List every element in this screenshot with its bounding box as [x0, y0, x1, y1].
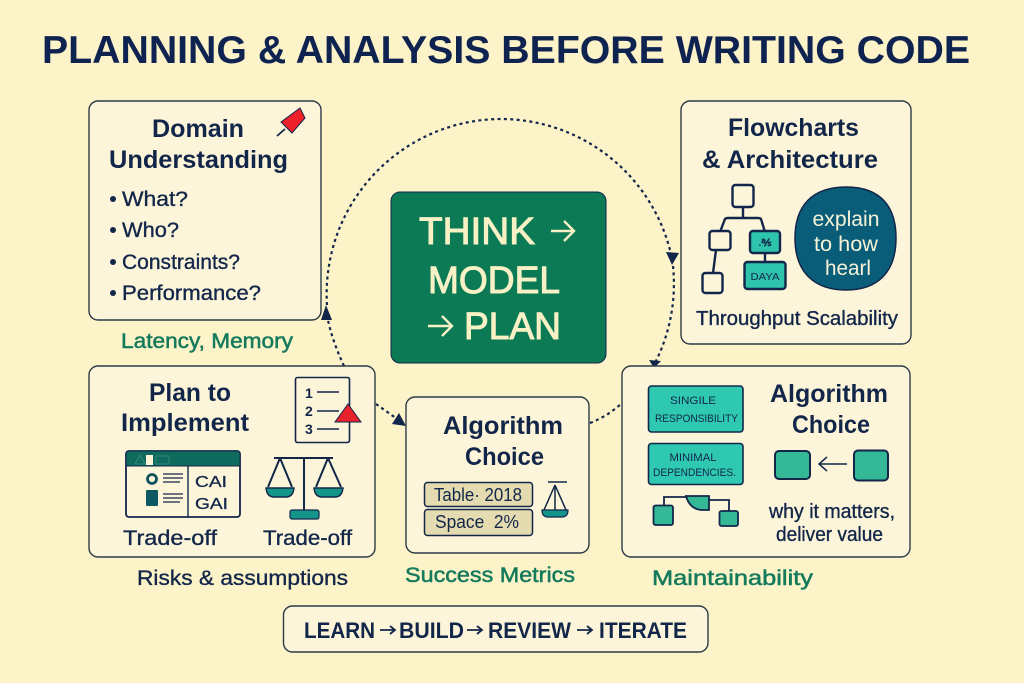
caption: risks and assumptions: Risks & assumptions — [137, 567, 348, 590]
icon: app window — [126, 451, 240, 517]
panel: learn build review iterate — [284, 606, 708, 652]
metric: space: Space 2% — [435, 512, 519, 532]
icon: flowchart: DAYA — [750, 271, 780, 283]
text: why it matters: why it matters, — [768, 501, 895, 523]
icon: numbered checklist with warning — [296, 378, 361, 442]
icon: numbered checklist with warning: 1 — [305, 385, 313, 401]
arrow: review to iterate — [577, 626, 592, 634]
text: why it matters: deliver value — [776, 524, 883, 546]
component: single responsibility: SINGILE — [670, 395, 716, 407]
caption: success metrics: Success Metrics — [405, 564, 575, 587]
heading: algorithm choice: Choice — [792, 411, 870, 439]
heading: algorithm choice: Choice — [465, 443, 544, 471]
heading: plan to implement: Implement — [121, 409, 250, 437]
title: PLANNING & ANALYSIS BEFORE WRITING CODE — [42, 29, 970, 72]
panel: learn build review iterate: LEARN — [304, 618, 375, 643]
component: minimal dependencies: MINIMAL — [670, 452, 716, 464]
arrow: build to review — [467, 626, 482, 634]
caption: trade-off right: Trade-off — [263, 527, 352, 550]
heading: plan to implement — [121, 379, 250, 437]
arrow: learn to build — [380, 626, 395, 634]
panel: central think model plan: PLAN — [464, 306, 561, 348]
heading: flowcharts and architecture: Flowcharts — [728, 114, 859, 142]
callout: explain blob: explain — [812, 208, 880, 231]
panel: algorithm choice center — [406, 397, 589, 553]
icon: numbered checklist with warning: 3 — [305, 421, 313, 437]
metric: space — [424, 510, 532, 536]
bullet list: Constraints? — [122, 251, 240, 274]
heading: domain understanding — [109, 115, 288, 174]
bullet list: Performance? — [122, 282, 261, 305]
panel: flowcharts and architecture — [681, 101, 911, 344]
panel: central think model plan — [391, 192, 606, 363]
bullet list — [110, 188, 261, 305]
callout: explain blob: to how — [814, 233, 879, 256]
caption: latency, memory: Latency, Memory — [121, 330, 294, 353]
component: single responsibility: RESPONSIBILITY — [655, 413, 739, 425]
heading: domain understanding: Domain — [152, 115, 244, 143]
component: minimal dependencies — [648, 444, 743, 484]
heading: algorithm choice — [770, 380, 888, 439]
panel: domain understanding — [89, 101, 321, 320]
icon: small scale — [542, 482, 568, 517]
heading: algorithm choice — [443, 412, 563, 471]
heading: algorithm choice: Algorithm — [443, 412, 563, 440]
panel: plan to implement — [89, 366, 375, 557]
callout: explain blob — [795, 187, 896, 290]
bullet list: Who? — [122, 219, 179, 242]
caption: maintainability: Maintainability — [652, 567, 814, 590]
component: single responsibility — [648, 386, 743, 432]
metric: table: Table· 2018 — [434, 485, 522, 505]
heading: flowcharts and architecture: & Architecture — [702, 146, 878, 174]
icon: app window: GAI — [195, 496, 228, 513]
panel: learn build review iterate: BUILD — [399, 618, 464, 643]
caption: throughput scalability: Throughput Scalability — [696, 308, 898, 330]
arrow: model to plan — [428, 316, 452, 336]
icon: red pin — [277, 108, 305, 136]
heading: plan to implement: Plan to — [149, 379, 231, 407]
dotted cycle arrows — [321, 119, 679, 426]
panel: learn build review iterate: ITERATE — [599, 618, 687, 643]
arrow: think to model — [551, 221, 574, 241]
icon: numbered checklist with warning: 2 — [305, 403, 313, 419]
panel: central think model plan: MODEL — [428, 260, 560, 302]
icon: app window: CAI — [195, 474, 227, 491]
icon: balance scale — [266, 458, 343, 519]
component: minimal dependencies: DEPENDENCIES. — [653, 467, 736, 479]
bullet list: What? — [122, 188, 188, 211]
icon: dependency network — [654, 496, 738, 526]
icon: flowchart: .℁ — [759, 238, 772, 249]
callout: explain blob: hearl — [825, 257, 871, 280]
text: why it matters — [768, 501, 895, 546]
heading: domain understanding: Understanding — [109, 146, 288, 174]
icon: two blocks with arrow — [775, 450, 888, 480]
panel: algorithm choice right — [622, 366, 910, 557]
panel: learn build review iterate: REVIEW — [488, 618, 571, 643]
heading: flowcharts and architecture — [702, 114, 878, 174]
icon: flowchart — [702, 185, 786, 293]
caption: trade-off left: Trade-off — [123, 527, 217, 550]
panel: central think model plan: THINK — [419, 211, 535, 253]
heading: algorithm choice: Algorithm — [770, 380, 888, 408]
